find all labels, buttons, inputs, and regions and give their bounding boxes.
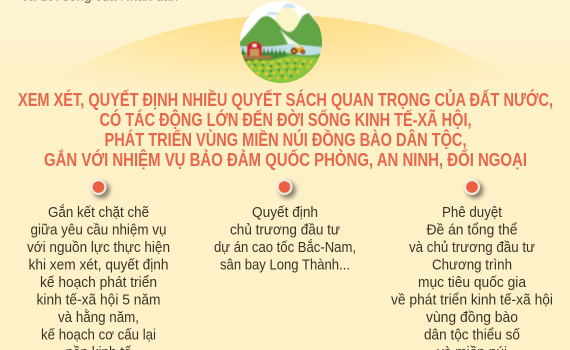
text column 3: mục tiêu quốc gia	[418, 274, 527, 291]
text column 3: vùng đồng bào	[426, 309, 518, 326]
text column 2: dự án cao tốc Bắc-Nam,	[214, 239, 356, 256]
text column 1: với nguồn lực thực hiện	[27, 239, 170, 256]
arc band behind the illustration	[25, 15, 545, 100]
text column 3	[391, 204, 553, 350]
text column 3: Chương trình	[432, 256, 512, 274]
heading: PHÁT TRIỂN VÙNG MIỀN NÚI ĐỒNG BÀO DÂN TỘC,	[104, 129, 466, 150]
heading: CÓ TÁC ĐỘNG LỚN ĐẾN ĐỜI SỐNG KINH TẾ-XÃ HỘI,	[100, 109, 472, 130]
text column 1: và hằng năm,	[58, 309, 139, 326]
text column 2: chủ trương đầu tư	[230, 222, 340, 238]
icon: red barn	[243, 42, 271, 59]
icon: farm landscape	[238, 0, 323, 85]
icon: corn field	[245, 56, 319, 83]
text column 1	[27, 204, 170, 350]
text column 3: về phát triển kinh tế-xã hội	[391, 292, 553, 308]
text column 2	[214, 204, 356, 274]
text column 2: sân bay Long Thành...	[220, 256, 350, 274]
text column 1: khi xem xét, quyết định	[28, 256, 168, 274]
text column 1: kế hoạch phát triển	[40, 274, 157, 291]
text column 3: Phê duyệt	[442, 204, 503, 221]
text column 3: dân tộc thiểu số	[424, 326, 521, 344]
text column 1: kinh tế-xã hội 5 năm	[36, 292, 160, 308]
text column 3: Đề án tổng thể	[426, 222, 518, 238]
text column 1: kế hoạch cơ cấu lại	[41, 326, 156, 344]
icon: tractor	[290, 45, 305, 54]
text column 2: Quyết định	[252, 204, 318, 221]
heading	[18, 89, 553, 170]
bullet 2	[276, 179, 296, 198]
bullet 1	[90, 179, 110, 198]
text column 1: Gắn kết chặt chẽ	[48, 204, 149, 221]
text column 3: và chủ trương đầu tư	[409, 239, 535, 256]
text column 1: giữa yêu cầu nhiệm vụ	[30, 222, 166, 238]
bullet 3	[464, 179, 484, 198]
